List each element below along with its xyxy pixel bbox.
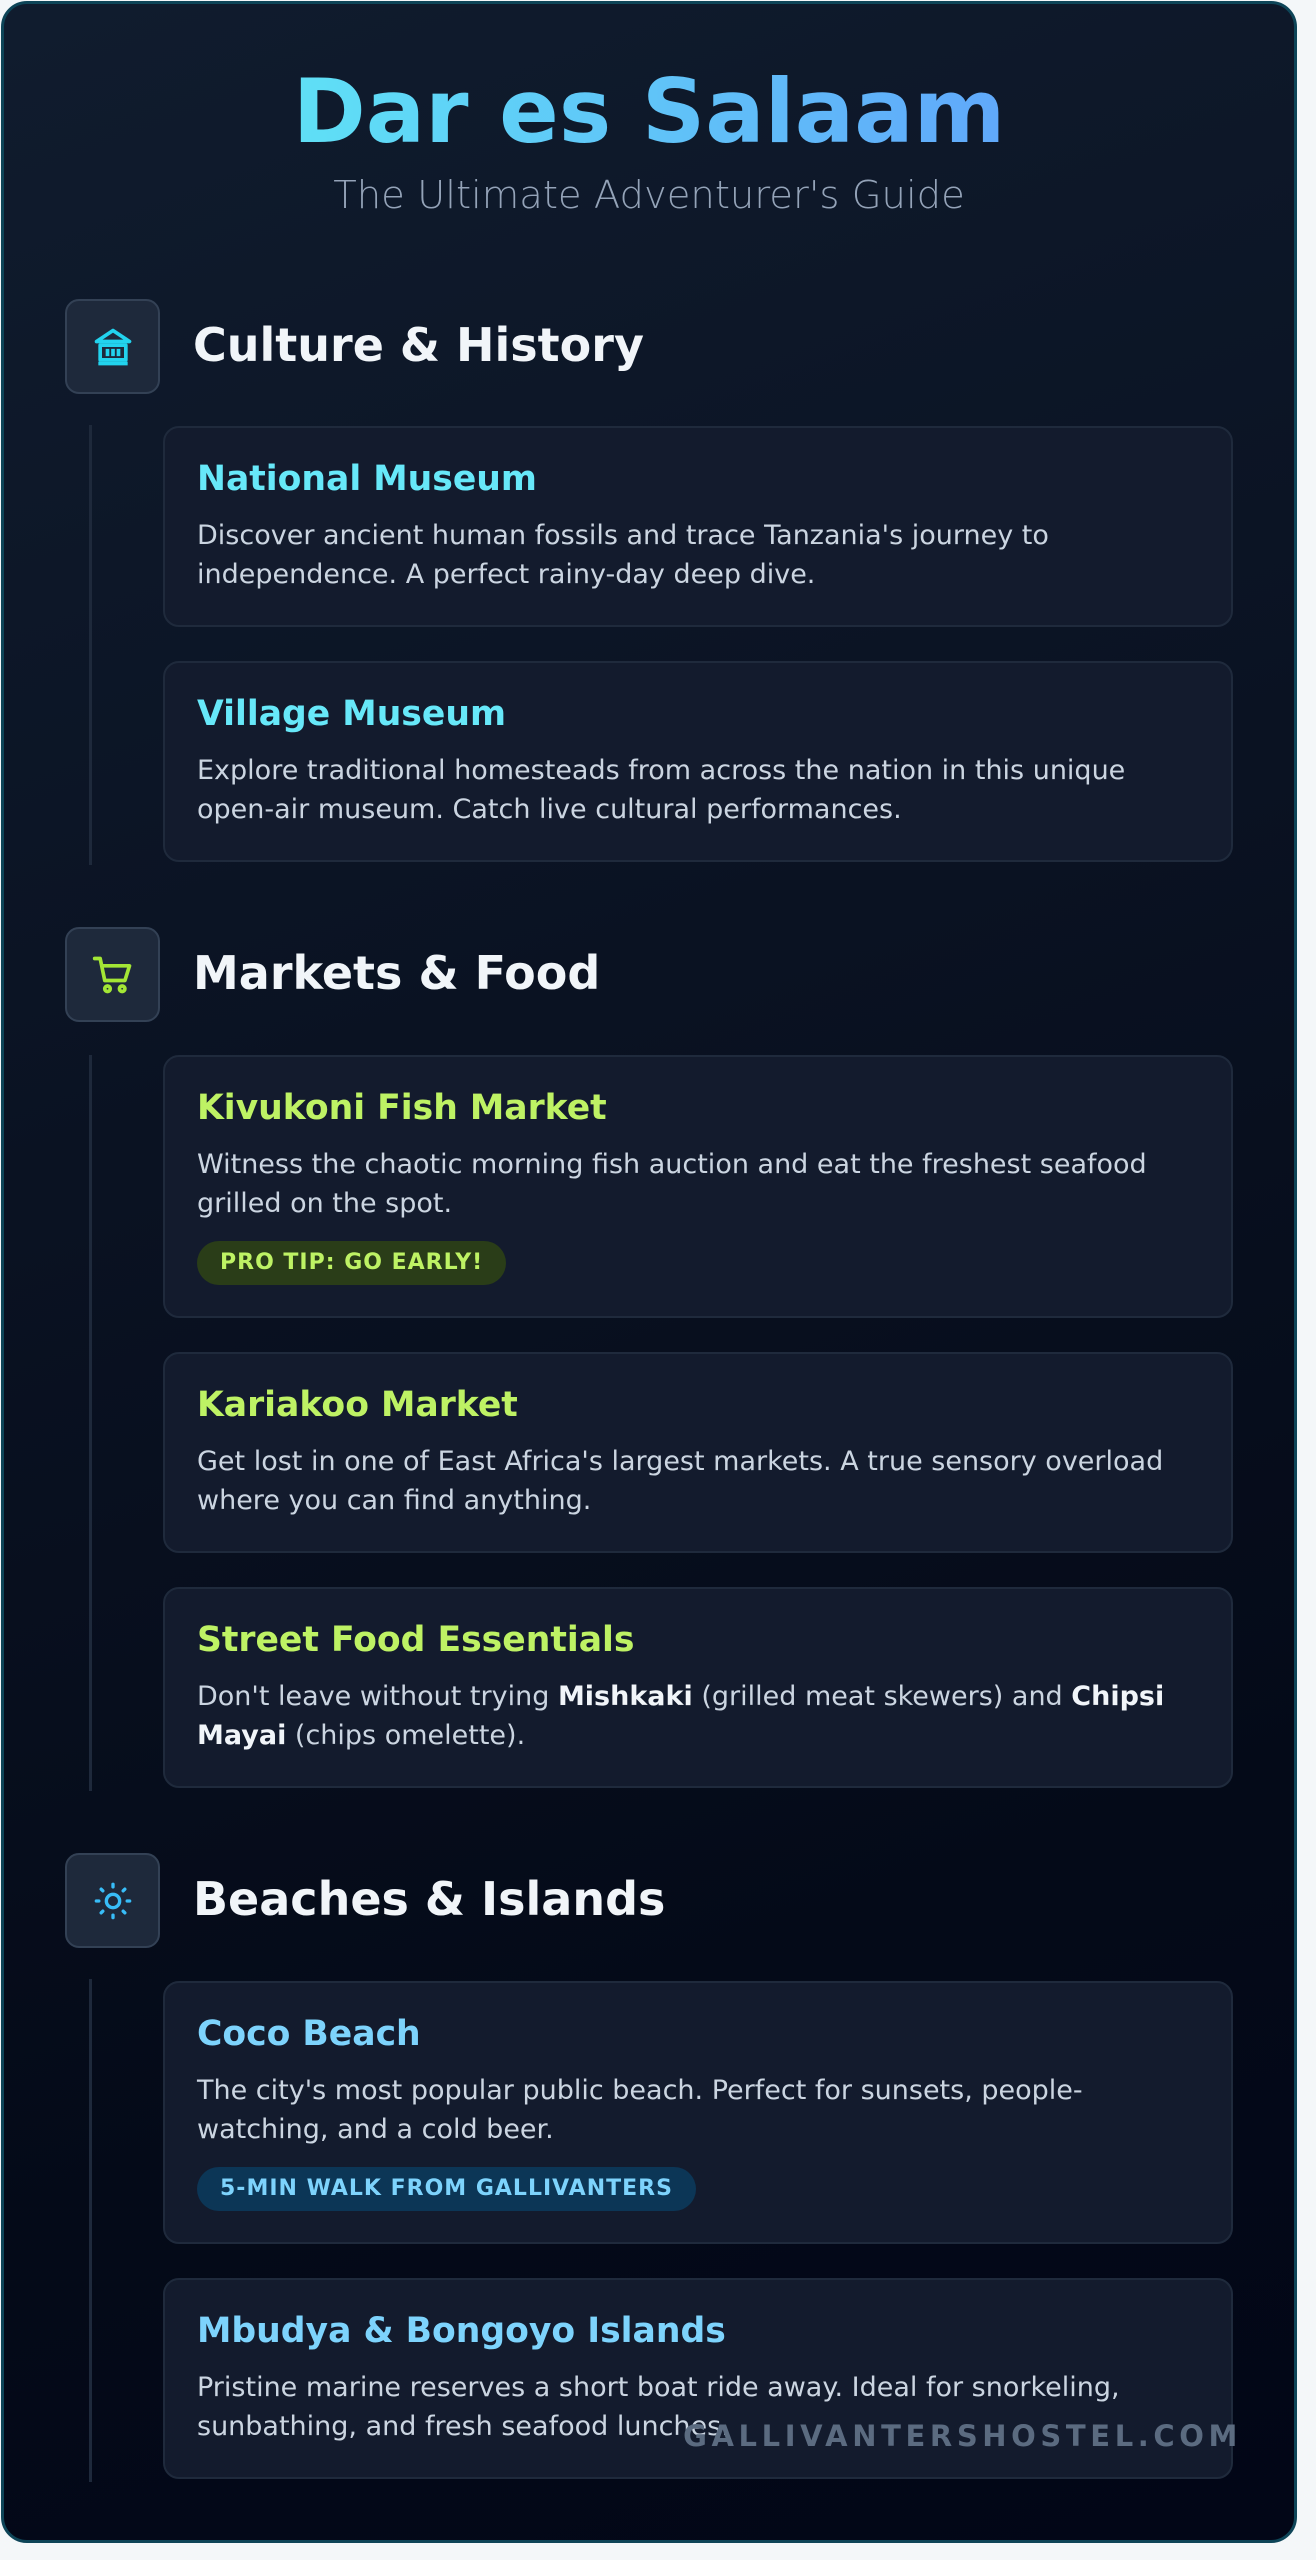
card: islands: Pristine marine reserves a short boat ride away. Ideal for snorkeling, sunbathing, and fresh seafood lunches. — [197, 2372, 1120, 2442]
card: street food: Street Food Essentials — [197, 1620, 634, 1660]
card: village museum — [163, 661, 1233, 862]
card: coco beach: Coco Beach — [197, 2014, 421, 2054]
icon: sun — [65, 1853, 160, 1948]
card: kivukoni: Witness the chaotic morning fish auction and eat the freshest seafood grilled on the spot. — [197, 1149, 1147, 1219]
card: village museum: Village Museum — [197, 694, 506, 734]
badge: walk: 5-MIN WALK FROM GALLIVANTERS — [220, 2176, 673, 2201]
badge: walk — [197, 2167, 696, 2211]
card: national museum: National Museum — [197, 459, 537, 499]
title: Dar es Salaam — [293, 60, 1005, 163]
icon: museum — [65, 299, 160, 394]
heading: beaches: Beaches & Islands — [193, 1872, 665, 1926]
card: kivukoni — [163, 1055, 1233, 1318]
badge: pro tip: PRO TIP: GO EARLY! — [220, 1250, 483, 1275]
footer: GALLIVANTERSHOSTEL.COM — [683, 2419, 1242, 2453]
card: kivukoni: Kivukoni Fish Market — [197, 1088, 607, 1128]
card: islands: Mbudya & Bongoyo Islands — [197, 2311, 726, 2351]
card: national museum — [163, 426, 1233, 627]
card: kariakoo: Get lost in one of East Africa's largest markets. A true sensory overload where you can find anything. — [197, 1446, 1163, 1516]
card: islands — [163, 2278, 1233, 2479]
card: national museum: Discover ancient human fossils and trace Tanzania's journey to independence. A perfect rainy-day deep dive. — [197, 520, 1049, 590]
badge: pro tip — [197, 1241, 506, 1285]
card: village museum: Explore traditional homesteads from across the nation in this unique open-air museum. Catch live cultural performances. — [197, 755, 1125, 825]
card: coco beach — [163, 1981, 1233, 2244]
card: kariakoo: Kariakoo Market — [197, 1385, 518, 1425]
card: kariakoo — [163, 1352, 1233, 1553]
heading: culture: Culture & History — [193, 318, 644, 372]
subtitle: The Ultimate Adventurer's Guide — [333, 173, 965, 218]
heading: markets: Markets & Food — [193, 946, 600, 1000]
card: coco beach: The city's most popular public beach. Perfect for sunsets, people-watching, and a cold beer. — [197, 2075, 1083, 2145]
card: street food — [163, 1587, 1233, 1788]
icon: cart — [65, 927, 160, 1022]
card: street food: Don't leave without trying Mishkaki (grilled meat skewers) and Chipsi Mayai (chips omelette). — [197, 1681, 1164, 1751]
